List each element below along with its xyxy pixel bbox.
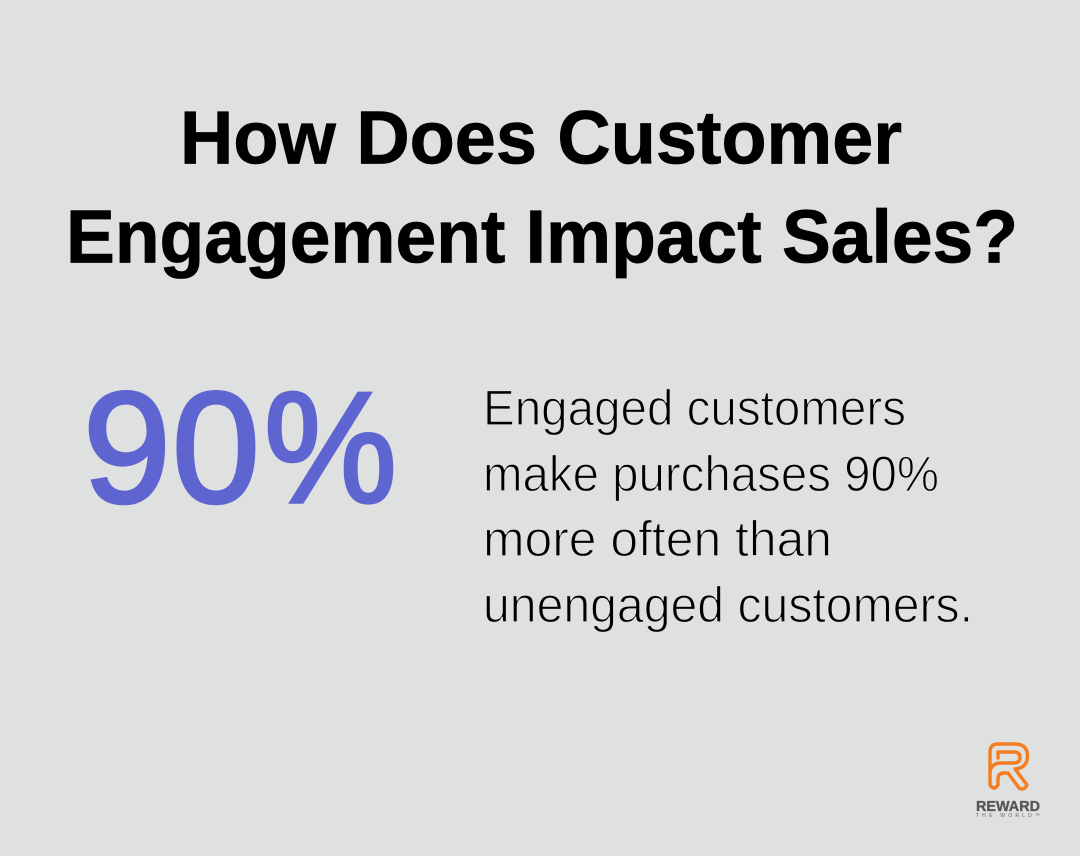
description text: Engaged customers [483,380,906,436]
tagline: THE WORLD™ [976,813,1040,819]
big statistic: 90% [83,360,397,536]
description text: make purchases 90% [483,446,939,502]
big statistic: 90%: % [264,360,397,536]
wordmark: REWARD [976,798,1040,815]
title: Engagement Impact Sales? [66,194,1018,278]
logo: Reward the World [976,744,1040,819]
description text [483,380,973,633]
title [66,96,1018,278]
description text: unengaged customers. [483,577,973,633]
big statistic: 90%: 9 [83,360,171,536]
description text: more often than [483,511,832,567]
big statistic: 90%: 0 [172,360,260,536]
title: How Does Customer [180,96,902,180]
icon: orange R mark [990,744,1028,789]
